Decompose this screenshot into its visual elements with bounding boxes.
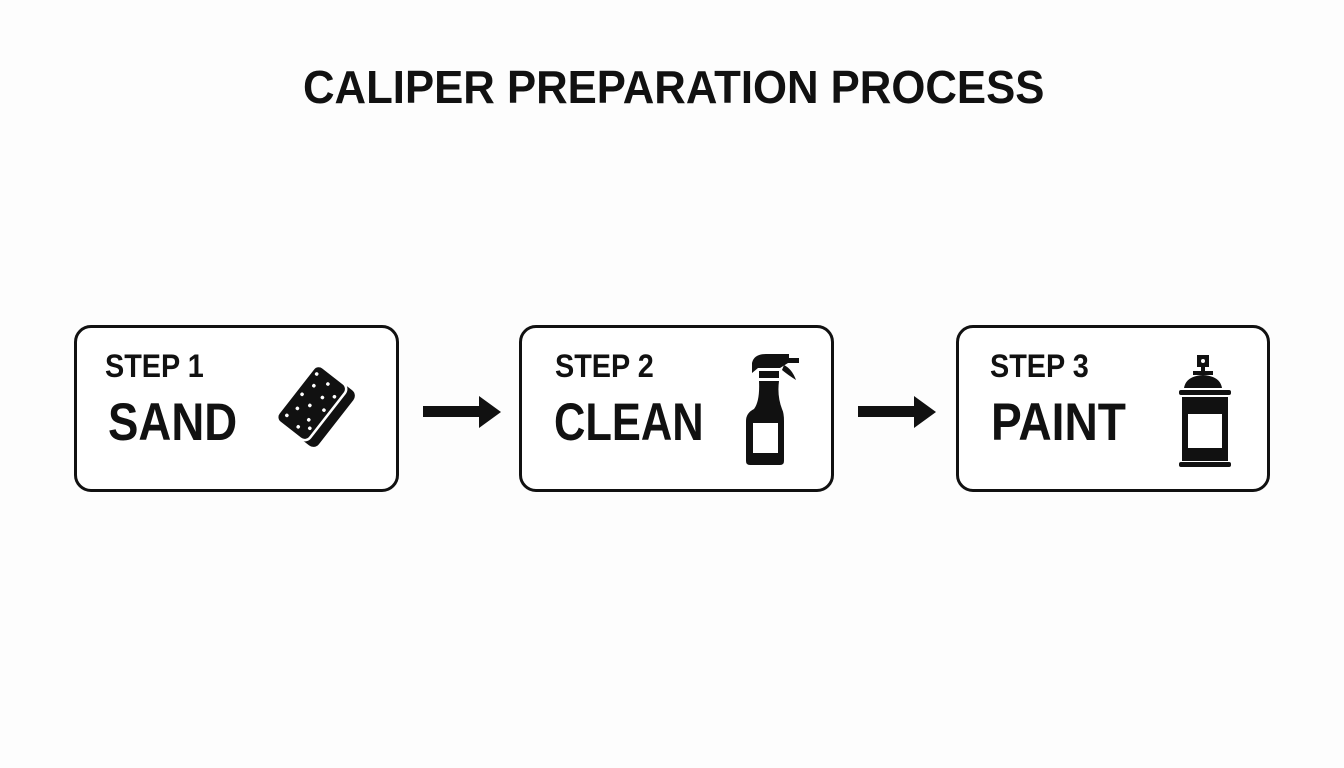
step 1 heading: SAND [108, 393, 237, 452]
icon: spray can [1179, 355, 1231, 467]
step 3 heading: PAINT [991, 393, 1126, 452]
panel: step 1 [74, 325, 399, 492]
step 2 label: STEP 2 [555, 348, 654, 384]
panel: step 3 [956, 325, 1270, 492]
step 2 heading: CLEAN [554, 393, 704, 452]
step 3 label: STEP 3 [990, 348, 1089, 384]
arrow 1 [423, 396, 501, 428]
icon: spray bottle [746, 354, 799, 465]
step 1 label: STEP 1 [105, 348, 204, 384]
panel: step 2 [519, 325, 834, 492]
title: CALIPER PREPARATION PROCESS [303, 61, 1044, 113]
icon: sanding sponge [278, 367, 355, 447]
arrow 2 [858, 396, 936, 428]
